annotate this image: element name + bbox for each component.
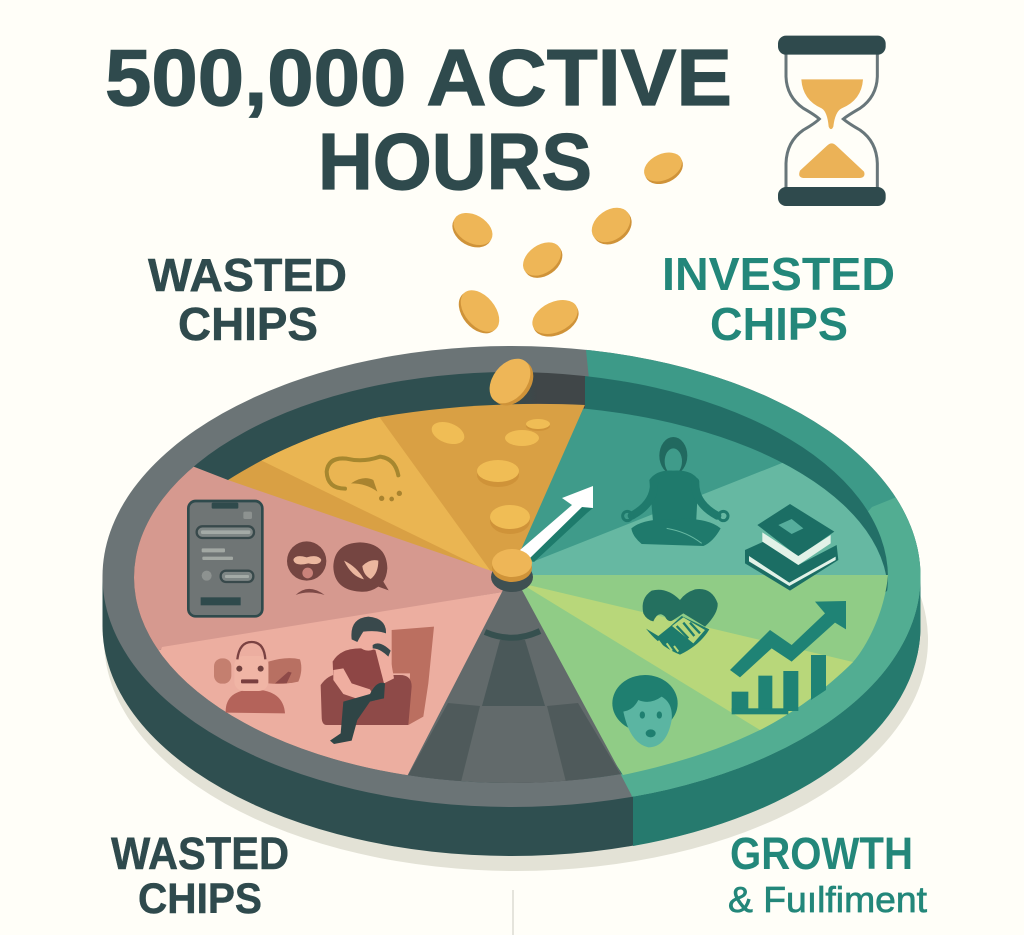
heading: invested chips xyxy=(662,248,895,350)
icon: hourglass xyxy=(778,36,886,206)
chips on the gold wedge xyxy=(429,418,550,534)
roulette wheel xyxy=(102,346,928,871)
icon: heart handshake xyxy=(643,589,718,655)
wheel side wall xyxy=(102,577,921,856)
segments: green wedges xyxy=(522,575,888,775)
heading: wasted chips top: CHIPS xyxy=(178,298,318,350)
heading: wasted chips bottom: CHIPS xyxy=(138,875,262,923)
heading: wasted chips bottom: WASTED xyxy=(111,828,289,879)
heading: growth and fulfilment xyxy=(728,828,927,920)
chip resting on the rim xyxy=(481,351,542,414)
icon: squiggle on gold wedge xyxy=(327,457,402,501)
title xyxy=(105,33,732,206)
segments: gold wedges xyxy=(228,404,585,572)
title: 500,000 ACTIVE xyxy=(105,33,732,122)
infographic canvas xyxy=(102,36,928,935)
icon: stack of books xyxy=(745,504,838,591)
segments: teal wedges xyxy=(520,408,886,575)
arrow: pointer xyxy=(520,486,593,562)
heading: invested chips: INVESTED xyxy=(662,248,895,300)
heading: growth and fulfilment: & Fuılfiment xyxy=(728,879,927,920)
wheel shadow xyxy=(104,409,928,871)
icon: child face xyxy=(612,675,678,747)
icon: phone xyxy=(188,501,262,616)
falling chips xyxy=(446,147,688,343)
icon: frustrated person xyxy=(214,642,301,713)
icon: speech bubble xyxy=(333,542,389,592)
inner wall xyxy=(120,360,905,790)
icon: sad face xyxy=(287,541,326,595)
icon: person slumped on sofa xyxy=(321,617,434,744)
lower right rim inside edge xyxy=(621,590,920,796)
icon: meditating person xyxy=(623,437,728,546)
segments: pink wedges xyxy=(134,466,503,776)
heading: wasted chips top: WASTED xyxy=(148,249,347,301)
wheel hub xyxy=(491,549,533,592)
icon: growth chart xyxy=(730,601,846,714)
heading: growth and fulfilment: GROWTH xyxy=(730,828,913,879)
heading: wasted chips bottom xyxy=(111,828,289,923)
segment: grey wedge xyxy=(408,590,622,783)
heading: invested chips: CHIPS xyxy=(710,298,848,350)
wheel rim xyxy=(102,346,920,807)
title: HOURS xyxy=(318,117,592,206)
heading: wasted chips top xyxy=(148,249,347,350)
